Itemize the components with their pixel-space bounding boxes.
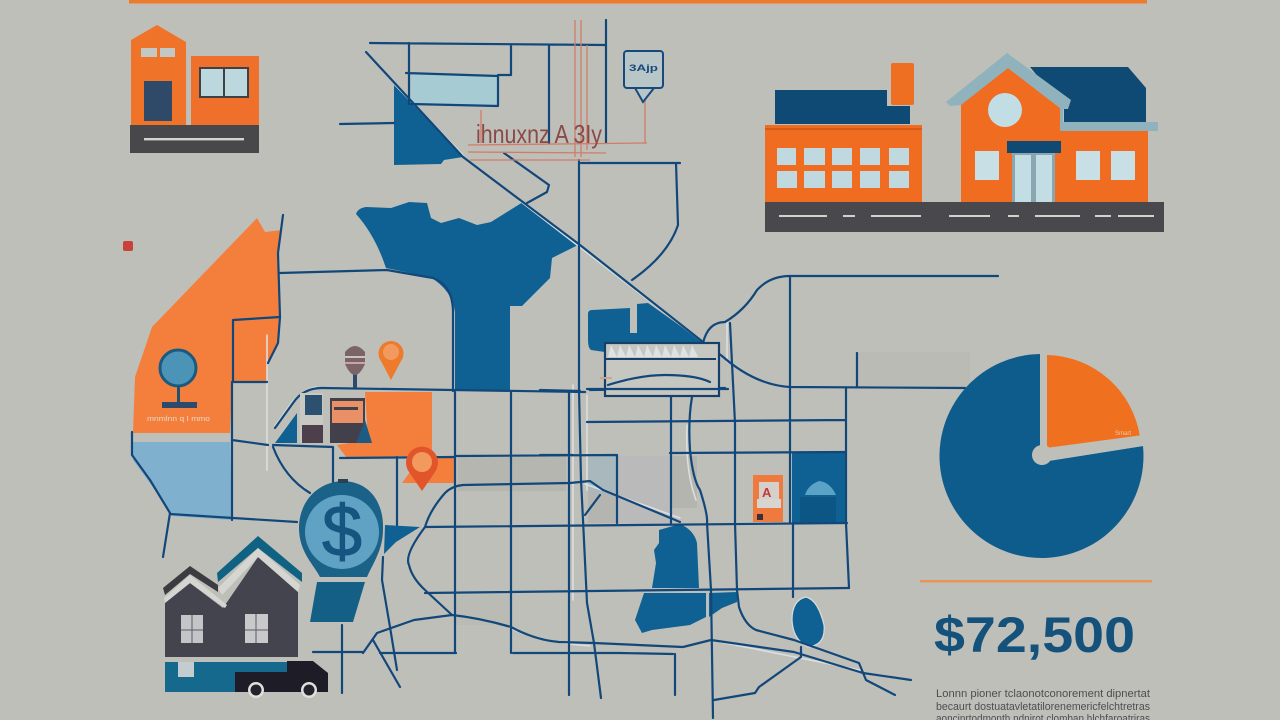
pie chart: Smart: [1115, 431, 1131, 437]
map: blue district square: [792, 453, 846, 523]
map: orange district: [133, 218, 282, 433]
icon: small orange map building: [753, 475, 783, 522]
bridge block: [587, 343, 728, 396]
icon: globe marker: [147, 350, 210, 423]
icon: navy shop roof: [775, 90, 910, 124]
map: pale blue block: [411, 74, 498, 106]
icon: map pin large: [406, 447, 438, 491]
map: central lake: [635, 524, 706, 633]
map: road network: [132, 20, 998, 718]
icon: map pin: [378, 341, 404, 380]
map: central orange district: [337, 392, 432, 458]
road with lane markings: [765, 202, 1164, 232]
icon: street sign: 3Ajp: [629, 63, 659, 73]
map: orange patch: [402, 457, 454, 483]
description text: Lonnn pioner tclaonotconorement dipnertat: [936, 688, 1150, 700]
icon: street sign: [624, 51, 663, 102]
map: channel: [709, 592, 737, 617]
map: blue triangle lake: [394, 84, 463, 165]
icon: dollar location pin: [299, 479, 383, 622]
icon: dollar location pin: $: [322, 492, 362, 572]
top accent bar: [129, 0, 1147, 4]
icon: small orange map building: A: [762, 485, 772, 500]
icon: orange shop with windows: [765, 125, 922, 202]
icon: dark houses with van: [163, 536, 328, 698]
icon: buildings by the road: [275, 393, 372, 443]
map: light blue district: [133, 442, 232, 520]
map: oval lake: [792, 597, 824, 647]
description text: [936, 688, 1150, 720]
map: large blue lake: [356, 202, 578, 391]
icon: house navy roof: [1030, 67, 1146, 122]
red marker dot: [123, 241, 133, 251]
description text: becaurt dostuatavletatilorenemericfelchtretras: [936, 701, 1150, 713]
map: red sketched street labels: ihnuxnz A 3Iy: [476, 119, 602, 149]
divider above value: [920, 580, 1152, 582]
icon: water tower: [345, 346, 365, 388]
icon: small orange building: [130, 25, 259, 153]
icon: globe marker: mnmlnn q I mmo: [147, 416, 210, 423]
map: teal corner: [384, 525, 420, 554]
pie chart: [939, 354, 1143, 558]
icon: shops and house illustration: [765, 53, 1164, 232]
icon: shop chimney: [891, 63, 914, 105]
map: red sketched street labels: [468, 20, 647, 160]
map: tinted land parcels: [455, 352, 970, 625]
icon: orange house: [946, 53, 1158, 202]
large value: $72,500: [934, 607, 1135, 663]
map: blue bay behind bridge: [588, 303, 703, 352]
